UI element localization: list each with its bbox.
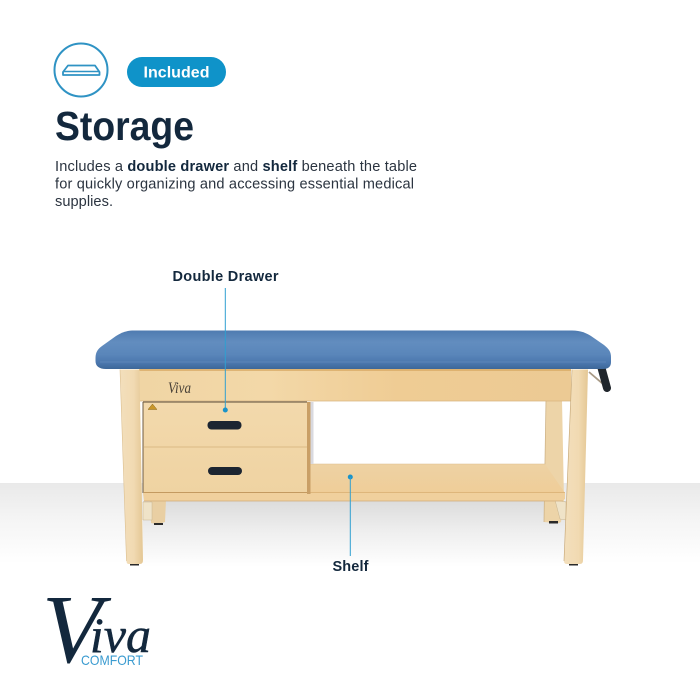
callout: Shelf: Shelf [332,559,369,575]
right leg [564,370,588,564]
callout: Double Drawer [172,269,279,412]
padded table top [96,330,611,369]
drawer handle upper [208,421,242,430]
double drawer [143,402,307,493]
shelf [143,464,565,501]
description text [55,159,417,210]
foot pads [130,521,578,566]
warning icon [148,404,157,410]
description text: for quickly organizing and accessing essential medical [55,176,414,192]
examination table [96,330,611,566]
description text: supplies. [55,194,113,210]
drawer handle lower [208,467,242,475]
description text: Includes a double drawer and shelf beneath the table [55,159,417,175]
back left leg [150,500,166,524]
badge: Included: Included [144,64,210,82]
callout: Shelf [332,474,369,575]
drawer side [307,402,310,494]
badge: Included [127,57,226,87]
logo: Viva Comfort [42,576,151,684]
icon: shelf in circle [54,44,108,96]
apron logo: Viva [168,380,191,397]
lever handle [589,368,607,388]
logo: Viva Comfort: V [42,576,112,684]
left leg [120,370,143,564]
back right leg [544,400,564,523]
title: Storage [55,103,194,149]
rear brackets [143,500,566,520]
logo: Viva Comfort: iva [90,607,151,663]
callout: Double Drawer: Double Drawer [172,269,279,285]
logo: Viva Comfort: COMFORT [81,652,143,668]
apron [139,369,571,401]
